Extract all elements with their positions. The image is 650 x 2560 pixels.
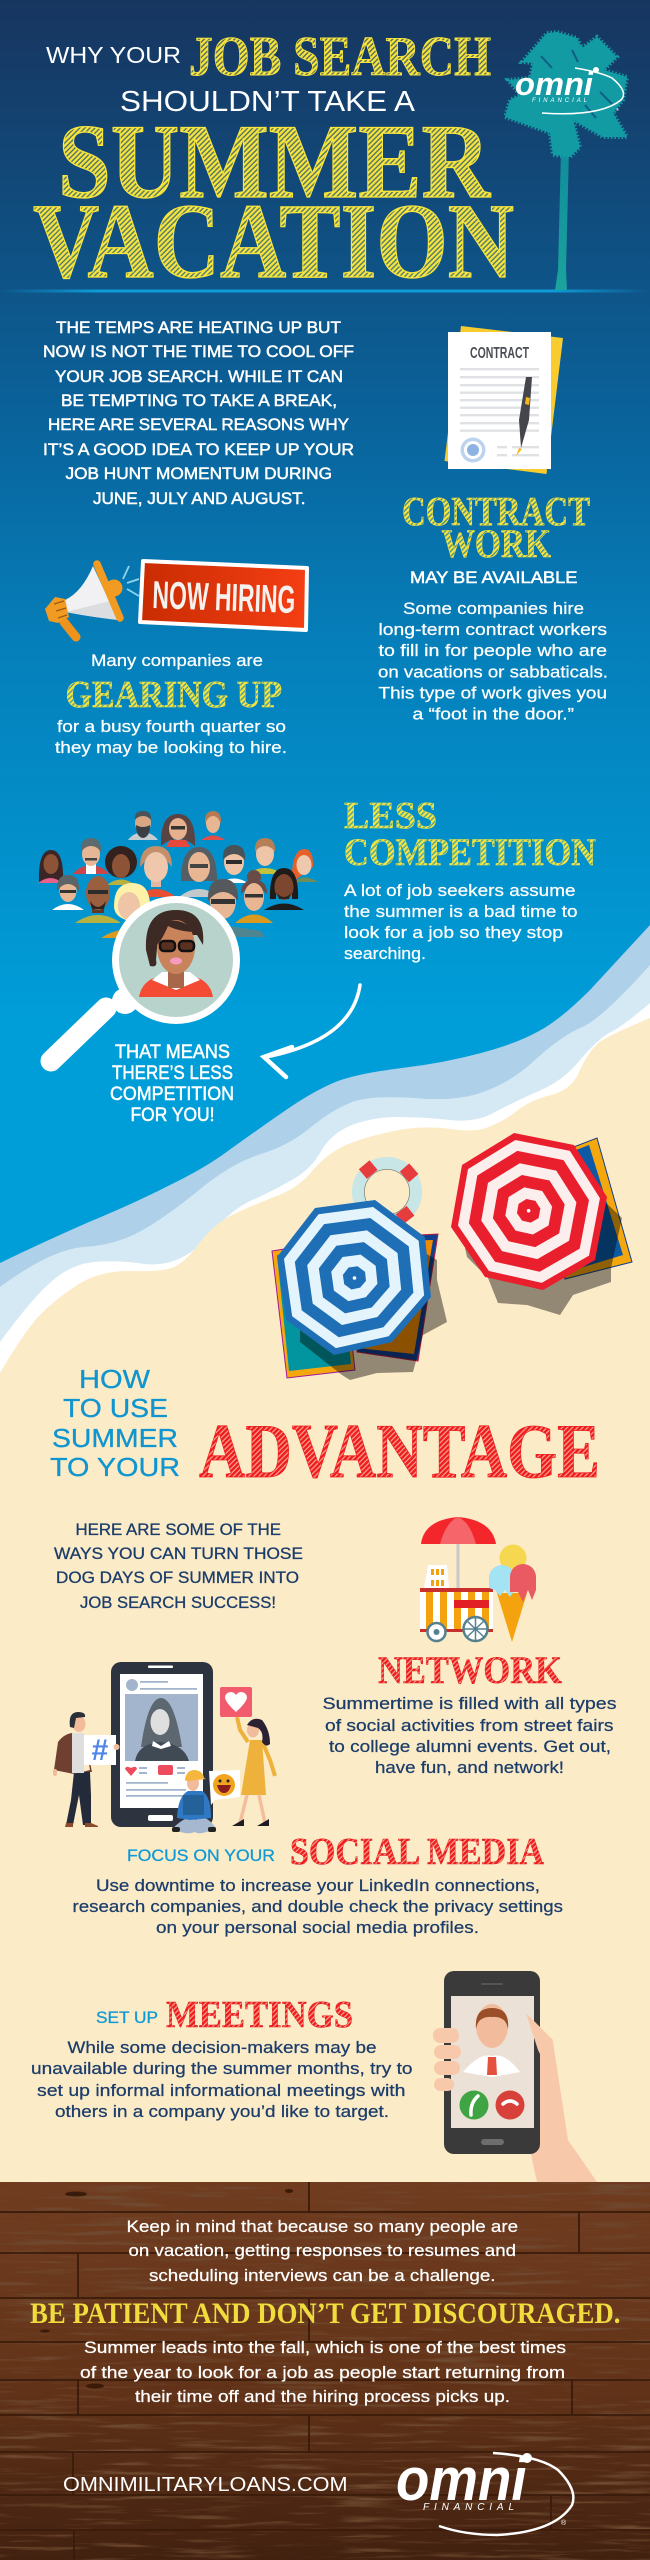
person: hair bun woman bbox=[235, 870, 273, 923]
heading stack: how to use summer to your: TO YOUR bbox=[50, 1452, 180, 1482]
body text: social media: on your personal social media profiles. bbox=[156, 1918, 479, 1937]
text: summer leads into the fall bbox=[80, 2338, 566, 2406]
title line: summer: SUMMER bbox=[58, 103, 491, 220]
heading: contract: CONTRACT bbox=[402, 488, 590, 534]
panel: meetings bbox=[31, 1971, 597, 2182]
arrow: points to callout bbox=[264, 985, 360, 1077]
heading: less: LESS bbox=[344, 795, 437, 837]
person: blond woman bbox=[101, 883, 152, 938]
text: keep in mind: Keep in mind that because so many people are bbox=[126, 2217, 518, 2236]
body text: less competition: look for a job so they stop bbox=[344, 923, 563, 942]
shadows bbox=[300, 1200, 622, 1380]
body text: meetings bbox=[31, 2038, 412, 2121]
person: afro woman bbox=[105, 846, 137, 885]
body text: contract work: Some companies hire bbox=[403, 599, 584, 618]
background: sky and sea bbox=[0, 0, 650, 1420]
person: grey beard man bbox=[206, 879, 265, 937]
towel: blue bbox=[540, 1138, 632, 1279]
panel: introduction text: IT’S A GOOD IDEA TO KEEP UP YOUR bbox=[43, 441, 354, 459]
heading: meetings: MEETINGS bbox=[166, 1994, 353, 2036]
text: keep in mind bbox=[126, 2217, 518, 2285]
logo: omni financial: FINANCIAL bbox=[532, 98, 587, 104]
icon: life ring bbox=[358, 1160, 418, 1224]
illustration: phone with social profile bbox=[111, 1662, 213, 1827]
heading stack: how to use summer to your: HOW bbox=[79, 1364, 151, 1394]
person: orange hair bbox=[201, 811, 225, 840]
text block: here are some of the ways bbox=[54, 1521, 303, 1612]
panel: introduction text: HERE ARE SEVERAL REASONS WHY bbox=[48, 416, 349, 434]
body text: meetings: While some decision-makers may be bbox=[68, 2038, 376, 2057]
logo: omni financial bbox=[515, 66, 624, 114]
text block: here are some of the ways: JOB SEARCH SUCCESS! bbox=[80, 1594, 276, 1612]
illustration: umbrellas, towels and life ring bbox=[272, 1133, 632, 1380]
logo: omni financial: ® bbox=[616, 107, 619, 112]
person: dreadlocks man bbox=[264, 868, 304, 910]
text block: here are some of the ways: DOG DAYS OF SUMMER INTO bbox=[56, 1569, 299, 1587]
figure: woman in yellow dress bbox=[232, 1717, 275, 1826]
horizon line bbox=[0, 290, 650, 292]
panel: wood footer bbox=[0, 2182, 650, 2560]
text: website: OMNIMILITARYLOANS.COM bbox=[63, 2474, 348, 2496]
heading: set up: SET UP bbox=[96, 2008, 158, 2027]
text block: here are some of the ways: WAYS YOU CAN TURN THOSE bbox=[54, 1545, 303, 1563]
towel: orange bbox=[357, 1234, 438, 1361]
sand bbox=[0, 1018, 650, 2190]
callout: that means less competition: THERE’S LESS bbox=[112, 1063, 233, 1084]
panel: introduction text: YOUR JOB SEARCH. WHILE IT CAN bbox=[55, 368, 343, 386]
icon: ice cream cone bbox=[489, 1544, 536, 1642]
body text: less competition: the summer is a bad time to bbox=[344, 902, 578, 921]
panel: contract work bbox=[378, 326, 608, 724]
text: keep in mind: scheduling interviews can be a challenge. bbox=[149, 2266, 496, 2285]
towel: teal bbox=[272, 1240, 355, 1378]
body text: less competition: searching. bbox=[344, 944, 426, 963]
heading stack: how to use summer to your bbox=[50, 1364, 180, 1482]
panel: gearing up bbox=[45, 561, 307, 757]
icon: contract document bbox=[444, 326, 563, 474]
body text: contract work: a “foot in the door.” bbox=[412, 704, 574, 724]
logo: omni financial: omni bbox=[515, 66, 594, 102]
title line: job search: JOB SEARCH bbox=[189, 26, 491, 88]
body text: less competition bbox=[344, 881, 578, 963]
icon: ice cream cart bbox=[420, 1517, 496, 1641]
panel: introduction text: JUNE, JULY AND AUGUST. bbox=[93, 490, 306, 508]
body text: gearing up bbox=[55, 717, 287, 757]
person: moustache man bbox=[73, 838, 109, 874]
panel: network bbox=[322, 1517, 616, 1777]
wood plank background bbox=[0, 2182, 650, 2560]
figure: man with hashtag sign: # bbox=[92, 1734, 109, 1767]
icon: red striped umbrella bbox=[451, 1133, 607, 1290]
icon: blue striped umbrella bbox=[277, 1200, 431, 1355]
body text: network: Summertime is filled with all types bbox=[322, 1694, 616, 1713]
body text: contract work: to fill in for people who are bbox=[378, 641, 607, 660]
person: dark woman bbox=[38, 850, 63, 883]
text: keep in mind: on vacation, getting responses to resumes and bbox=[128, 2241, 516, 2260]
person: brown hair man bbox=[247, 838, 283, 874]
person: grey short hair bbox=[52, 875, 84, 910]
body text: network: of social activities from street fairs bbox=[325, 1716, 614, 1735]
body text: gearing up: for a busy fourth quarter so bbox=[57, 717, 286, 736]
person: light brown hair bbox=[136, 846, 176, 897]
panel: waves and beach bbox=[0, 925, 650, 2190]
person: red hair bbox=[292, 849, 318, 882]
body text: network: to college alumni events. Get out, bbox=[329, 1737, 611, 1756]
title line: why your: WHY YOUR bbox=[46, 42, 181, 68]
logo: omni financial footer bbox=[396, 2446, 573, 2535]
body text: network bbox=[322, 1694, 616, 1777]
logo: omni financial footer: ® bbox=[561, 2519, 567, 2527]
heading: gearing up: GEARING UP bbox=[66, 674, 282, 716]
title line: vacation: VACATION bbox=[33, 183, 514, 301]
text: summer leads into the fall: their time off and the hiring process picks up. bbox=[135, 2387, 510, 2406]
body text: gearing up: they may be looking to hire. bbox=[55, 738, 287, 757]
wave band: foam bbox=[0, 1003, 650, 1420]
body text: less competition: A lot of job seekers assume bbox=[344, 881, 576, 900]
body text: contract work: on vacations or sabbaticals. bbox=[378, 662, 608, 682]
text: summer leads into the fall: of the year to look for a job as people start returning from bbox=[80, 2363, 565, 2382]
title line: shouldn't take a: SHOULDN’T TAKE A bbox=[120, 86, 416, 118]
icon: magnifying glass with candidate bbox=[51, 896, 240, 1061]
sign: now hiring: NOW HIRING bbox=[152, 574, 296, 622]
text: many companies are: Many companies are bbox=[91, 651, 263, 670]
heading stack: how to use summer to your: SUMMER bbox=[52, 1423, 178, 1453]
logo: omni financial footer: omni bbox=[396, 2446, 528, 2513]
crowd of job seekers bbox=[38, 811, 318, 938]
body text: meetings: unavailable during the summer months, try to bbox=[31, 2059, 412, 2078]
illustration: hand holding phone bbox=[433, 1971, 597, 2182]
heading: network: NETWORK bbox=[378, 1649, 563, 1692]
figure: man with hashtag sign bbox=[53, 1712, 120, 1827]
icon: megaphone bbox=[45, 564, 139, 637]
person: bald man bbox=[75, 876, 121, 923]
subheading: may be available: MAY BE AVAILABLE bbox=[410, 569, 578, 587]
icon: palm tree bbox=[505, 32, 627, 290]
body text: social media: research companies, and double check the privacy settings bbox=[72, 1897, 563, 1916]
figure: seated boy with smartphone bbox=[172, 1770, 216, 1833]
panel: introduction text: NOW IS NOT THE TIME TO COOL OFF bbox=[43, 343, 354, 361]
sign: now hiring bbox=[140, 561, 307, 630]
heading: competition: COMPETITION bbox=[344, 831, 596, 874]
text block: here are some of the ways: HERE ARE SOME OF THE bbox=[76, 1521, 281, 1539]
wave band: shallow bbox=[0, 965, 650, 1420]
callout: that means less competition bbox=[110, 1042, 234, 1126]
icon: emoji speech bubble bbox=[209, 1770, 240, 1805]
body text: meetings: set up informal informational meetings with bbox=[37, 2081, 406, 2100]
heading: social media: SOCIAL MEDIA bbox=[290, 1831, 544, 1873]
logo: omni financial footer: FINANCIAL bbox=[423, 2502, 514, 2513]
body text: network: have fun, and network! bbox=[375, 1758, 564, 1777]
wave band: deep bbox=[0, 925, 650, 1420]
person: grey hair woman bbox=[179, 847, 219, 897]
heading: work: WORK bbox=[442, 521, 551, 566]
text: summer leads into the fall: Summer leads into the fall, which is one of the best times bbox=[84, 2338, 566, 2357]
callout: that means less competition: THAT MEANS bbox=[115, 1042, 230, 1063]
body text: social media bbox=[72, 1876, 563, 1937]
panel: social media bbox=[53, 1662, 563, 1937]
person: black hair man bbox=[220, 845, 248, 883]
body text: contract work: This type of work gives you bbox=[378, 684, 607, 702]
heading stack: how to use summer to your: TO USE bbox=[63, 1393, 168, 1423]
panel: introduction text: THE TEMPS ARE HEATING UP BUT bbox=[56, 319, 341, 337]
callout: that means less competition: FOR YOU! bbox=[130, 1105, 214, 1126]
panel: introduction text: BE TEMPTING TO TAKE A BREAK, bbox=[61, 392, 337, 410]
icon: contract document: CONTRACT bbox=[470, 345, 529, 362]
person: bearded man bbox=[128, 811, 158, 840]
panel: less competition bbox=[38, 795, 596, 1126]
panel: introduction text bbox=[43, 319, 354, 508]
heading: how to use summer to your advantage bbox=[50, 1364, 600, 1494]
panel: hero title bbox=[0, 26, 650, 301]
callout: that means less competition: COMPETITION bbox=[110, 1084, 234, 1105]
body text: social media: Use downtime to increase your LinkedIn connections, bbox=[96, 1876, 540, 1895]
icon: heart reaction bbox=[220, 1687, 252, 1717]
body text: meetings: others in a company you’d like to target. bbox=[55, 2102, 389, 2121]
heading: focus on your: FOCUS ON YOUR bbox=[127, 1846, 275, 1865]
body text: contract work: long-term contract workers bbox=[378, 620, 607, 639]
person: woman with glasses bbox=[161, 814, 195, 847]
body text: contract work bbox=[378, 599, 608, 724]
panel: introduction text: JOB HUNT MOMENTUM DURING bbox=[66, 465, 332, 483]
